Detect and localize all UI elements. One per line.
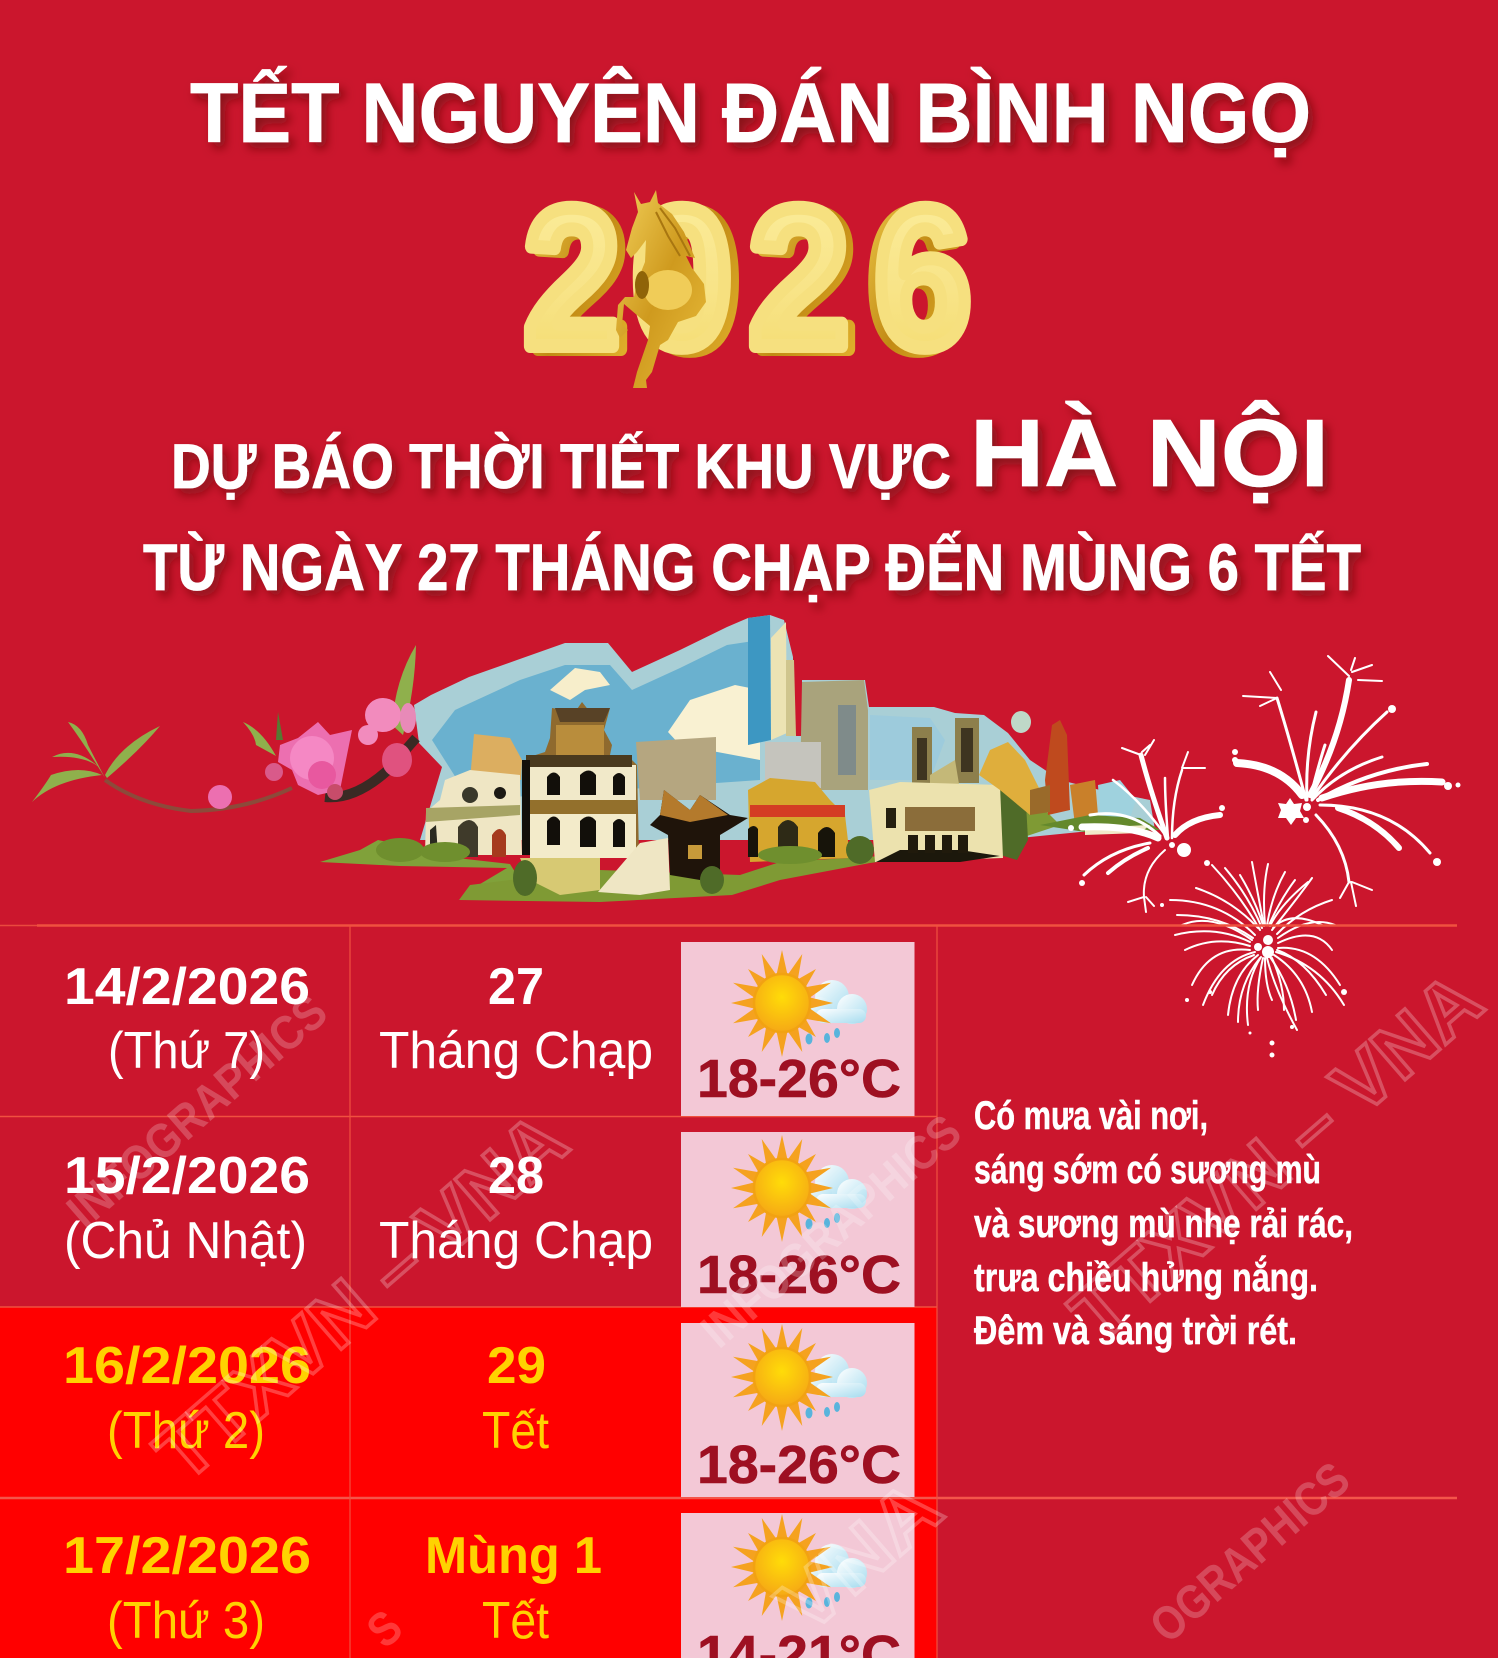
row 1 weather [681,942,914,1116]
icon: golden horse [616,190,706,388]
gold 2026 with horse: 2 [749,167,849,388]
table grid [0,926,1457,1658]
row 2 dates [64,1147,653,1270]
foreground trees [376,836,874,896]
gold 2026 with horse: 6 [868,170,964,391]
colonnade pavilion [425,770,522,857]
row 1 dates: (Thứ 7) [108,1022,265,1080]
forecast description: sáng sớm có sương mù [974,1148,1321,1192]
burst firework [1170,862,1344,1030]
gate and stairs [598,838,670,895]
forecast description: trưa chiều hửng nắng. [974,1254,1318,1300]
watermarks [57,955,1498,1658]
branch [105,780,292,811]
dark pavilion [650,790,748,880]
watermarks: OGRAPHICS [1140,1453,1360,1653]
yellow gate [748,778,850,862]
row 3 dates: (Thứ 2) [107,1402,265,1460]
large firework [1237,656,1442,906]
gold 2026 with horse: 0 [632,167,732,388]
row 3 dates: Tết [482,1402,549,1460]
row 1 dates [64,958,653,1080]
row 3 weather [681,1323,914,1497]
forecast description: và sương mù nhẹ rải rác, [974,1202,1353,1246]
leaves [32,645,416,802]
watermarks: TTXVN – VNA [1053,955,1498,1358]
row 4 dates: Mùng 1 [425,1527,602,1585]
table text [63,958,653,1650]
heading: Hà Nội: HÀ NỘI [970,399,1329,507]
watermarks: INFOGRAPHICS [691,1105,971,1358]
row 4 weather [681,1513,914,1658]
clouds [550,668,610,700]
gold 2026 with horse: 2 [756,170,856,391]
row 4 dates: 17/2/2026 [63,1527,311,1585]
gold 2026 with horse: 6 [875,167,971,388]
row 4 dates [63,1527,602,1650]
gold 2026 with horse [524,167,971,391]
heading line 1: TẾT NGUYÊN ĐÁN BÌNH NGỌ [190,66,1311,160]
row 1 dates: Tháng Chạp [379,1022,653,1080]
peach blossom branch [32,645,416,811]
watermarks: TTXVN – VNA [138,1095,583,1498]
watermarks: S [357,1601,413,1658]
row 1 weather: 18-26°C [697,1049,901,1109]
row 3 dates: 16/2/2026 [63,1337,311,1395]
heading line 2: DỰ BÁO THỜI TIẾT KHU VỰC [171,431,951,502]
city skyline illustration [320,615,1160,902]
forecast description: Có mưa vài nơi, [974,1094,1208,1138]
row 1 dates: 14/2/2026 [64,958,310,1016]
fireworks [1068,656,1460,1058]
red tower and temple roofs [979,720,1160,835]
watermarks: VNA [760,1462,958,1650]
tan buildings [470,734,522,780]
forecast description [974,1094,1353,1353]
row 2 dates: (Chủ Nhật) [64,1212,307,1270]
forecast description: Đêm và sáng trời rét. [974,1309,1297,1353]
gold 2026 with horse: 0 [640,170,740,391]
small firework [1082,740,1220,912]
row 4 dates: Tết [482,1592,549,1650]
row 1 dates: 27 [488,958,544,1016]
row 3 weather: 18-26°C [697,1435,901,1495]
top rule [0,924,37,926]
turtle tower [522,702,639,858]
row 2 dates: 28 [488,1147,544,1205]
table: bright Tết rows [0,1307,936,1658]
row 2 weather: 18-26°C [697,1245,901,1305]
row 3 dates [63,1337,549,1460]
ground and grass [320,840,520,900]
sky [414,615,1155,840]
row 3 dates: 29 [487,1337,546,1395]
row 2 dates: 15/2/2026 [64,1147,310,1205]
row 2 dates: Tháng Chạp [379,1212,653,1270]
high-rise towers [748,615,771,745]
weather panels [681,942,914,1658]
row 2 weather [681,1132,914,1307]
opera house [869,718,1003,862]
firework sparks [1068,705,1460,1058]
title [143,66,1361,604]
gold 2026 with horse: 2 [524,167,620,388]
watermarks: INFOGRAPHICS [57,985,337,1238]
flowers [208,698,416,809]
row 4 dates: (Thứ 3) [107,1592,265,1650]
gold 2026 with horse: 2 [532,170,628,391]
